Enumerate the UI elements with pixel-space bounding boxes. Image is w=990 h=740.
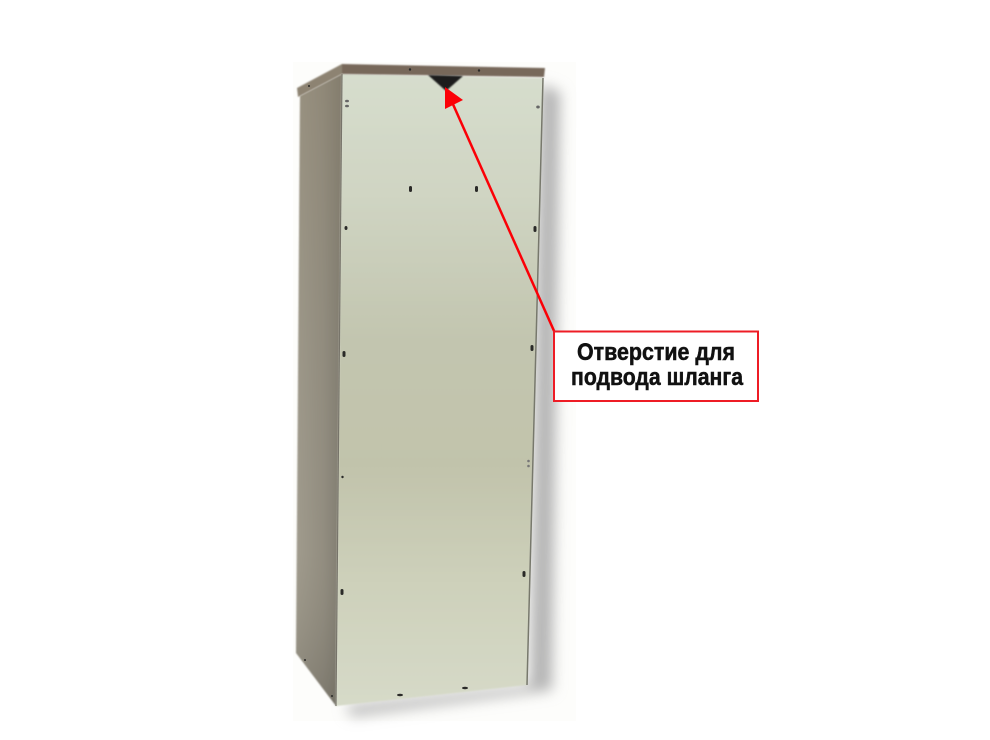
cabinet rear panel	[336, 74, 543, 706]
callout: hose opening label: подвода шланга	[571, 364, 744, 391]
callout: hose opening label	[554, 332, 758, 401]
cabinet lid	[297, 64, 545, 97]
callout: hose opening label: Отверстие для	[577, 339, 735, 366]
cabinet side panel	[296, 74, 342, 706]
product photo: cabinet rear view	[293, 62, 576, 721]
hose opening	[428, 75, 463, 91]
arrow pointing to hose opening	[445, 87, 554, 332]
mounting holes	[304, 68, 540, 697]
